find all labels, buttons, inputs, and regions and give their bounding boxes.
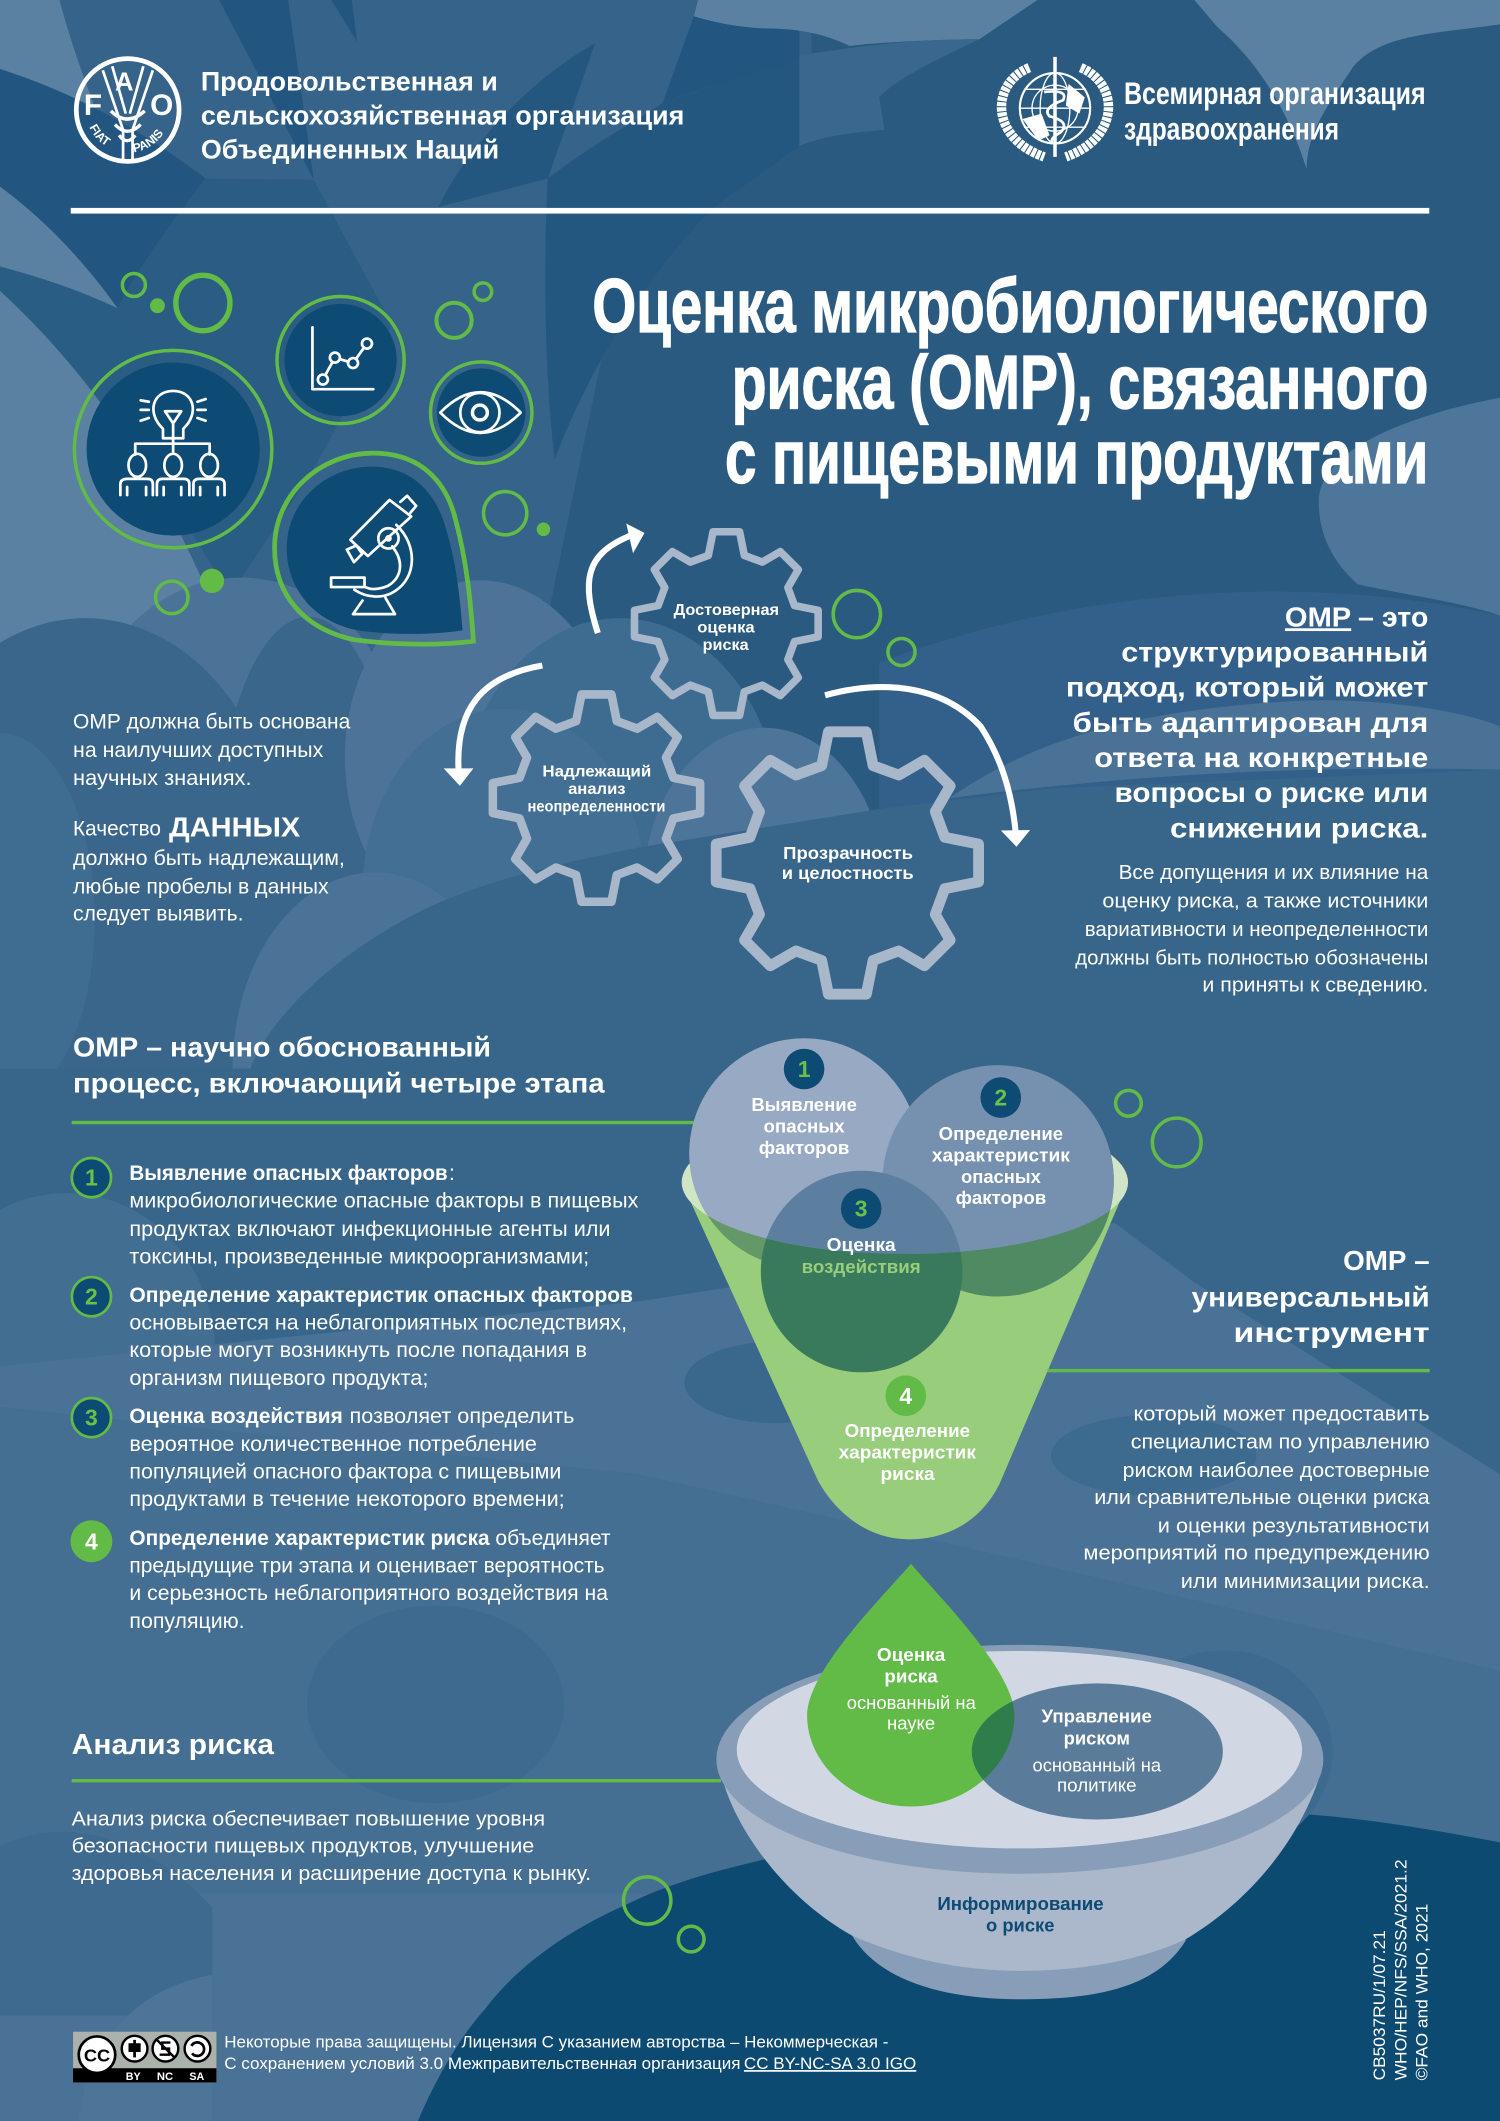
FAO name: сельскохозяйственная организация <box>201 100 684 130</box>
logo: FAO emblem: F <box>84 89 102 122</box>
heading: universal tool: инструмент <box>1234 1317 1430 1348</box>
text: universal tool description: риском наиболее достоверные <box>1123 1460 1430 1482</box>
bowl diagram: Информирование <box>937 1893 1104 1914</box>
header rule <box>71 208 1429 214</box>
title <box>592 264 1428 500</box>
heading: universal tool <box>1192 1245 1430 1348</box>
funnel diagram: 3 <box>855 1196 868 1222</box>
arrow: left down <box>444 666 542 786</box>
logo: FAO emblem <box>74 56 182 164</box>
WHO name: здравоохранения <box>1124 110 1339 146</box>
text: license: CC BY-NC-SA 3.0 IGO <box>744 2054 916 2073</box>
logo: FAO emblem: O <box>150 89 173 122</box>
step 2: 2 <box>85 1284 98 1310</box>
text: universal tool description: и оценки результативности <box>1158 1516 1430 1538</box>
funnel diagram: опасных <box>764 1116 846 1137</box>
heading: universal tool: универсальный <box>1192 1282 1430 1313</box>
funnel diagram: опасных <box>961 1166 1042 1187</box>
text: risk analysis description: Анализ риска обеспечивает повышение уровня <box>72 1808 545 1830</box>
text: universal tool description: который может предоставить <box>1133 1403 1430 1425</box>
arrow: right down <box>825 687 1030 847</box>
icon: microscope in drop <box>275 453 473 644</box>
text: data quality <box>73 710 351 925</box>
decorative bubbles: bottom <box>624 1877 704 1952</box>
decorative bubbles: near gears <box>833 590 915 666</box>
FAO name: Продовольственная и <box>201 67 498 97</box>
heading: four steps <box>73 1031 605 1099</box>
gear: uncertainty analysis <box>493 694 700 902</box>
text: document codes <box>1370 1859 1432 2080</box>
bowl diagram: науке <box>887 1712 935 1733</box>
step 4: Определение характеристик риска <box>129 1527 490 1550</box>
bowl diagram: основанный на <box>1033 1754 1162 1775</box>
decorative bubbles: top left <box>122 274 550 614</box>
funnel diagram: 2 <box>994 1085 1007 1111</box>
text: data quality: ОМР должна быть основана <box>73 710 351 733</box>
step 3: Оценка воздействия <box>129 1405 343 1428</box>
text: assumptions: Все допущения и их влияние на <box>1119 862 1429 884</box>
step 1: токсины, произведенные микроорганизмами; <box>129 1246 589 1269</box>
icon: eye <box>431 362 532 463</box>
text: data quality: следует выявить. <box>73 902 243 925</box>
text: OMR definition: быть адаптирован для <box>1073 707 1428 738</box>
text: license: Некоторые права защищены. Лицензия С указанием авторства – Некоммерческая - <box>224 2032 888 2051</box>
text: assumptions: и приняты к сведению. <box>1202 975 1428 997</box>
step 1 <box>72 1158 639 1269</box>
step 4 <box>70 1520 611 1633</box>
bowl diagram: Управление <box>1041 1706 1152 1727</box>
text: document codes: ©FAO and WHO, 2021 <box>1413 1904 1432 2080</box>
step 2: которые могут возникнуть после попадания в <box>129 1339 587 1362</box>
logo: FAO emblem: A <box>115 69 134 97</box>
gear: uncertainty analysis: Надлежащий <box>542 763 651 780</box>
text: document codes: WHO/HEP/NFS/SSA/2021.2 <box>1392 1859 1411 2080</box>
text: data quality: научных знаниях. <box>73 767 252 790</box>
text: OMR definition: – это <box>1358 601 1428 632</box>
step 1: 1 <box>85 1165 98 1191</box>
text: OMR definition: ответа на конкретные <box>1094 742 1428 773</box>
funnel diagram: воздействия <box>802 1256 921 1277</box>
text: risk analysis description: здоровья населения и расширение доступа к рынку. <box>72 1863 591 1885</box>
text: universal tool description <box>1083 1403 1430 1593</box>
text: data quality: любые пробелы в данных <box>73 875 329 898</box>
text: OMR definition: структурированный <box>1121 636 1428 667</box>
text: data quality: должно быть надлежащим, <box>73 847 345 870</box>
heading: universal tool: ОМР – <box>1343 1245 1430 1276</box>
bowl diagram: основанный на <box>847 1692 977 1713</box>
WHO name <box>1124 75 1426 146</box>
text: assumptions: оценку риска, а также источники <box>1102 891 1428 913</box>
bowl diagram <box>716 1564 1332 1999</box>
text: universal tool description: специалистам по управлению <box>1131 1432 1430 1454</box>
text: OMR definition: снижении риска. <box>1170 812 1428 843</box>
step 4: объединяет <box>495 1527 611 1550</box>
gear: uncertainty analysis: неопределенности <box>528 799 665 816</box>
gear: reliable risk assessment <box>634 532 818 715</box>
logo: WHO emblem <box>1002 57 1108 157</box>
text: OMR definition: ОМР <box>1285 601 1351 632</box>
text: assumptions: вариативности и неопределенности <box>1085 919 1428 941</box>
icon: light bulb and team <box>74 350 272 548</box>
step 1: продуктах включают инфекционные агенты или <box>129 1218 611 1241</box>
bowl diagram: риска <box>884 1666 939 1687</box>
funnel diagram: Определение <box>845 1420 970 1441</box>
step 2: основывается на неблагоприятных последствиях, <box>129 1312 627 1335</box>
step 3: популяцией опасного фактора с пищевыми <box>129 1461 561 1484</box>
text: universal tool description: мероприятий по предупреждению <box>1083 1543 1430 1565</box>
funnel diagram: 4 <box>899 1383 912 1409</box>
text: license <box>224 2032 916 2073</box>
text: OMR definition: вопросы о риске или <box>1115 777 1428 808</box>
text: assumptions: должны быть полностью обозначены <box>1075 947 1428 969</box>
icon: Creative Commons badge: NC <box>157 2071 173 2083</box>
WHO name: Всемирная организация <box>1124 75 1426 111</box>
arrow: up <box>589 523 644 633</box>
step 1: Выявление опасных факторов <box>129 1162 448 1185</box>
text: assumptions <box>1075 862 1429 997</box>
green rule: universal tool <box>1047 1369 1430 1372</box>
step 2: Определение характеристик опасных факторов <box>129 1284 633 1307</box>
gear: reliable risk assessment: Достоверная <box>674 602 779 619</box>
gear: transparency and integrity <box>716 732 979 994</box>
step 4: предыдущие три этапа и оценивает вероятность <box>129 1554 605 1577</box>
step 4: 4 <box>85 1528 98 1554</box>
step 3: продуктами в течение некоторого времени; <box>129 1488 565 1511</box>
funnel diagram: характеристик <box>932 1145 1071 1166</box>
funnel diagram: факторов <box>759 1137 849 1158</box>
gear: reliable risk assessment: риска <box>703 637 749 654</box>
step 3: вероятное количественное потребление <box>129 1433 537 1456</box>
step 4: и серьезность неблагоприятного воздействия на <box>129 1582 608 1605</box>
gear: transparency and integrity: Прозрачность <box>783 843 913 863</box>
text: universal tool description: или сравнительные оценки риска <box>1094 1487 1430 1509</box>
bowl diagram: Оценка <box>877 1644 946 1665</box>
logo: FAO emblem: PANIS <box>134 130 162 152</box>
step 2 <box>72 1277 633 1390</box>
icon: Creative Commons badge <box>73 2032 216 2083</box>
decorative bubbles: near funnel <box>1116 1090 1201 1167</box>
text: risk analysis description <box>72 1808 591 1885</box>
funnel diagram <box>682 1038 1128 1539</box>
text: document codes: CB5037RU/1/07.21 <box>1370 1930 1389 2080</box>
heading: four steps: ОМР – научно обоснованный <box>73 1031 491 1062</box>
icon: Creative Commons badge: SA <box>189 2071 204 2083</box>
text: data quality: ДАННЫХ <box>169 812 301 843</box>
funnel diagram: Оценка <box>827 1234 897 1255</box>
green rule: risk analysis <box>72 1779 721 1782</box>
text: risk analysis description: безопасности пищевых продуктов, улучшение <box>72 1835 534 1857</box>
heading: four steps: процесс, включающий четыре этапа <box>73 1068 605 1099</box>
gear: uncertainty analysis: анализ <box>568 781 626 798</box>
funnel diagram: риска <box>881 1463 936 1484</box>
step 1: микробиологические опасные факторы в пищевых <box>129 1190 639 1213</box>
bowl diagram: политике <box>1057 1775 1137 1796</box>
step 3 <box>72 1398 575 1511</box>
step 3: 3 <box>85 1405 98 1431</box>
step 1: : <box>449 1162 455 1185</box>
heading: risk analysis: Анализ риска <box>72 1729 274 1761</box>
text: data quality: на наилучших доступных <box>73 739 324 762</box>
funnel diagram: Выявление <box>751 1094 857 1115</box>
gear: reliable risk assessment: оценка <box>697 619 755 636</box>
funnel diagram: 1 <box>798 1056 811 1082</box>
bowl diagram: о риске <box>986 1915 1054 1936</box>
logo: FAO emblem: FIAT <box>90 124 112 145</box>
FAO name: Объединенных Наций <box>201 134 499 164</box>
gear: transparency and integrity: и целостность <box>782 863 914 883</box>
text: universal tool description: или минимизации риска. <box>1181 1571 1430 1593</box>
icon: chart <box>277 297 404 424</box>
step 4: популяцию. <box>129 1610 245 1633</box>
bowl diagram: риском <box>1064 1727 1130 1748</box>
text: data quality: Качество <box>73 817 161 840</box>
funnel diagram: Определение <box>939 1123 1063 1144</box>
funnel diagram: факторов <box>956 1187 1046 1208</box>
step 2: организм пищевого продукта; <box>129 1367 428 1390</box>
text: OMR definition: подход, который может <box>1066 672 1428 703</box>
text: OMR definition <box>1066 601 1428 843</box>
icon: Creative Commons badge: BY <box>126 2071 141 2083</box>
FAO name <box>201 67 684 164</box>
icon: Creative Commons badge: CC <box>84 2045 111 2065</box>
step 3: позволяет определить <box>350 1405 575 1428</box>
text: license: С сохранением условий 3.0 Межправительственная организация <box>224 2054 741 2073</box>
green rule: steps <box>72 1121 694 1124</box>
funnel diagram: характеристик <box>839 1442 977 1463</box>
